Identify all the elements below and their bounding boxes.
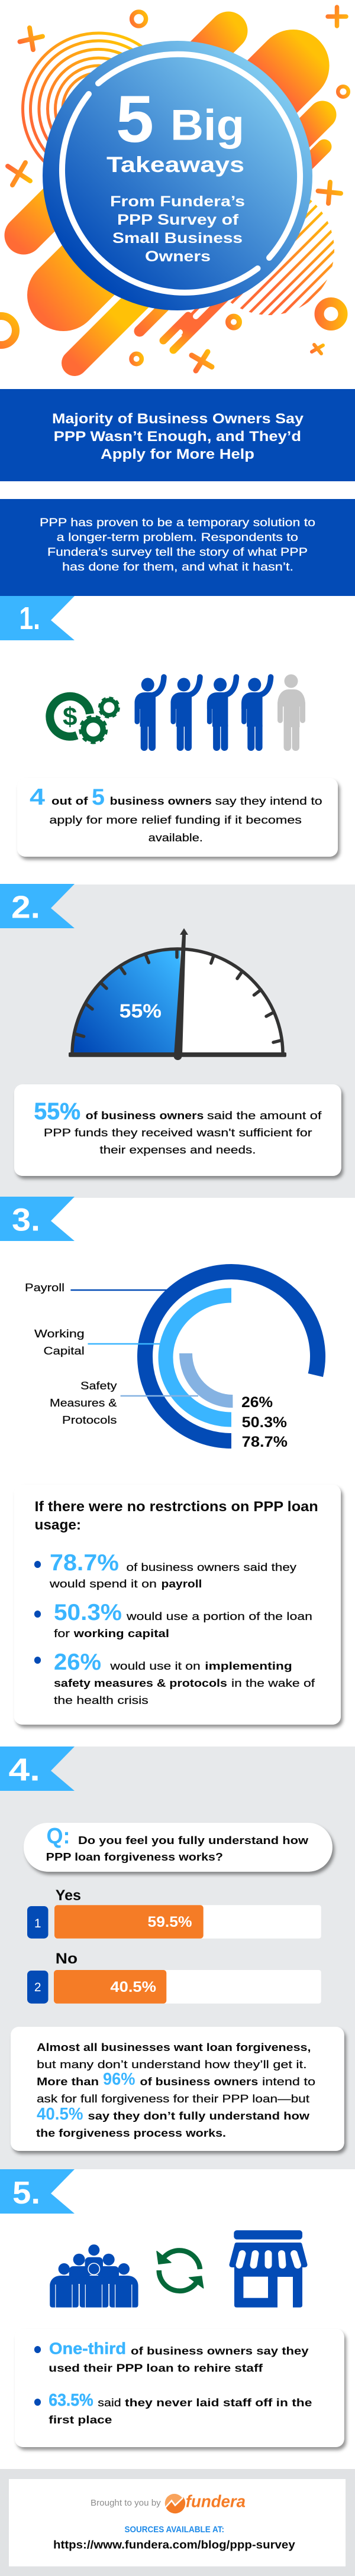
banner: intro: PPP has proven to be a temporary solution to xyxy=(40,517,315,529)
bar: yes: 59.5% xyxy=(148,1914,192,1930)
card: rehire staff xyxy=(15,2329,344,2447)
chart values: 78.7% xyxy=(242,1434,288,1450)
bar: yes: 1 xyxy=(34,1917,41,1930)
ribbon: 1 xyxy=(0,596,75,640)
bullet: one-third: One-third xyxy=(49,2340,126,2358)
banner: headline: PPP Wasn’t Enough, and They’d xyxy=(54,429,301,445)
bar: no: 2 xyxy=(34,1981,41,1994)
question pill xyxy=(24,1823,333,1872)
ribbon: 3: 3. xyxy=(12,1203,40,1238)
chart labels: Safety xyxy=(80,1379,117,1392)
footer xyxy=(0,2469,355,2576)
logo: fundera: fundera xyxy=(186,2493,246,2512)
card: loan forgiveness: the forgiveness process works. xyxy=(36,2127,226,2139)
bullet: payroll: of business owners said they xyxy=(127,1561,297,1573)
card: 55 percent: 55% xyxy=(34,1099,80,1125)
banner: headline: Majority of Business Owners Say xyxy=(52,411,304,427)
bullet: safety: would use it on xyxy=(109,1660,201,1672)
footer: https://www.fundera.com/blog/ppp-survey xyxy=(53,2539,295,2552)
ribbon: 1: 1. xyxy=(19,601,40,636)
title: 5 xyxy=(116,82,154,156)
bar: yes: Yes xyxy=(56,1887,81,1904)
bullet: safety: the health crisis xyxy=(54,1694,149,1706)
card: 4 out of 5: available. xyxy=(149,831,203,844)
bar: no: No xyxy=(56,1950,78,1967)
card: 4 out of 5: 4 xyxy=(30,785,45,810)
card: 4 out of 5: business owners xyxy=(110,795,212,807)
bullet: payroll xyxy=(34,1550,297,1590)
bar chart: yes and no xyxy=(27,1887,321,2004)
card: loan usage xyxy=(14,1485,341,1725)
title: From Fundera’s xyxy=(110,193,245,210)
footer: SOURCES AVAILABLE AT: xyxy=(124,2525,224,2535)
ribbon: 5: 5. xyxy=(12,2175,40,2211)
bar: no: 40.5% xyxy=(110,1979,156,1995)
icon: storefront xyxy=(229,2230,308,2308)
bullet: never laid off: said xyxy=(98,2396,121,2409)
icon: group of staff xyxy=(50,2244,138,2308)
title: Takeaways xyxy=(106,153,244,177)
bullet: working capital: working capital xyxy=(73,1627,169,1639)
ribbon: 5 xyxy=(0,2169,75,2214)
gauge chart: 55% xyxy=(120,1000,162,1022)
card: loan forgiveness: say they don’t fully understand how xyxy=(88,2110,310,2122)
bar: no xyxy=(27,1950,321,2004)
bullet: working capital xyxy=(34,1600,312,1639)
card heading xyxy=(34,1499,318,1533)
card: 4 out of 5: say they intend to xyxy=(215,795,322,807)
ribbon: 3 xyxy=(0,1197,75,1241)
banner: intro xyxy=(0,499,355,596)
chart labels: Working xyxy=(34,1327,85,1340)
card: loan forgiveness: but many don’t understand how they’ll get it. xyxy=(37,2058,307,2070)
chart values xyxy=(241,1394,288,1450)
bullet: payroll: would spend it on xyxy=(49,1577,157,1590)
ribbon: 2: 2. xyxy=(11,890,40,925)
title: Owners xyxy=(145,248,211,265)
forked pill xyxy=(163,296,228,350)
bullet: working capital: for xyxy=(54,1627,70,1639)
bullet: payroll: payroll xyxy=(161,1577,202,1590)
bullet: safety: in the wake of xyxy=(231,1677,315,1689)
banner: intro: Fundera’s survey tell the story of what PPP xyxy=(47,546,308,559)
chart labels: Payroll xyxy=(25,1281,64,1294)
card: loan forgiveness: 96% xyxy=(103,2070,135,2089)
card: 4 out of 5: apply for more relief funding if it becomes xyxy=(49,814,302,826)
card heading: usage: xyxy=(34,1517,81,1533)
ribbon: 4: 4. xyxy=(8,1752,40,1788)
bullet: payroll: 78.7% xyxy=(50,1550,119,1576)
title: Big xyxy=(170,102,244,149)
radial bar chart xyxy=(25,1272,318,1450)
bullet: safety: 26% xyxy=(54,1650,101,1675)
hero illustration xyxy=(0,7,355,371)
chart labels: Protocols xyxy=(62,1414,117,1426)
chart values: 26% xyxy=(241,1394,273,1411)
question pill: Q: xyxy=(46,1824,70,1849)
card: loan forgiveness: intend to xyxy=(262,2075,315,2088)
icon: money gears: $ xyxy=(63,702,78,731)
bullet: safety: safety measures & protocols xyxy=(54,1677,227,1689)
hero ring arcs xyxy=(62,54,300,293)
card heading: If there were no restrctions on PPP loan xyxy=(34,1499,318,1515)
logo: fundera xyxy=(165,2493,246,2513)
card: loan forgiveness: Almost all businesses want loan forgiveness, xyxy=(37,2041,311,2053)
title xyxy=(106,82,245,265)
card: loan forgiveness xyxy=(11,2027,344,2151)
card: loan forgiveness: ask for full forgiveness for their PPP loan—but xyxy=(37,2092,309,2105)
section 2 background xyxy=(0,884,355,1198)
icon: money gears xyxy=(50,696,119,745)
gauge chart xyxy=(69,928,286,1060)
ribbon: 2 xyxy=(0,884,75,928)
decorative crosses xyxy=(8,7,346,371)
bullet: never laid off xyxy=(34,2391,312,2426)
title: PPP Survey of xyxy=(117,212,239,228)
bullet: one-third xyxy=(34,2340,309,2374)
gradient pills xyxy=(24,31,324,363)
card: loan forgiveness: of business owners xyxy=(140,2075,258,2088)
card: 4 out of 5: out of xyxy=(51,795,88,807)
bullet: one-third: of business owners say they xyxy=(131,2345,309,2357)
bullet: safety xyxy=(34,1650,315,1706)
chart leader lines xyxy=(70,1290,198,1396)
gauge ticks xyxy=(75,951,282,1042)
gauge needle xyxy=(174,928,188,1060)
card: 55 percent: PPP funds they received wasn't sufficient for xyxy=(44,1126,312,1139)
decorative rings xyxy=(0,12,348,364)
bullet: never laid off: 63.5% xyxy=(49,2391,93,2410)
chart labels: Capital xyxy=(44,1344,85,1357)
card: 55 percent: said the amount of xyxy=(207,1109,322,1122)
grey person xyxy=(277,674,305,751)
icon: refresh arrows xyxy=(157,2250,204,2291)
footer: Brought to you by xyxy=(91,2498,161,2508)
card: 55 percent xyxy=(14,1084,341,1176)
banner: intro: has done for them, and what it hasn’t. xyxy=(62,561,293,573)
question pill: Do you feel you fully understand how xyxy=(78,1834,309,1846)
bullet: never laid off: they never laid staff off in the xyxy=(125,2396,312,2409)
chart values: 50.3% xyxy=(242,1414,287,1431)
bar: yes xyxy=(27,1887,321,1939)
card: loan forgiveness: More than xyxy=(37,2075,99,2088)
section 4 background xyxy=(0,1747,355,2169)
concentric line arcs xyxy=(22,33,174,184)
card: 4 out of 5 xyxy=(17,778,338,857)
question pill: PPP loan forgiveness works? xyxy=(46,1851,223,1863)
card: 55 percent: their expenses and needs. xyxy=(99,1143,256,1156)
hero circle xyxy=(43,41,312,310)
icon: four of five people xyxy=(135,674,305,751)
card: loan forgiveness: 40.5% xyxy=(37,2105,83,2124)
bullet: working capital: would use a portion of the loan xyxy=(126,1610,312,1622)
card: 4 out of 5: 5 xyxy=(92,785,105,810)
striped circle xyxy=(231,200,334,315)
card: 55 percent: of business owners xyxy=(86,1109,204,1122)
chart labels: Measures & xyxy=(50,1396,117,1409)
title: Small Business xyxy=(112,230,243,247)
bullet: working capital: 50.3% xyxy=(54,1600,122,1625)
ribbon: 4 xyxy=(0,1747,75,1791)
banner: headline xyxy=(0,389,355,481)
bullet: never laid off: first place xyxy=(49,2413,112,2426)
banner: intro: a longer-term problem. Respondents to xyxy=(57,532,298,544)
bullet: one-third: used their PPP loan to rehire staff xyxy=(49,2362,263,2374)
banner: headline: Apply for More Help xyxy=(101,446,254,462)
chart labels xyxy=(25,1281,117,1426)
bullet: safety: implementing xyxy=(205,1660,292,1672)
